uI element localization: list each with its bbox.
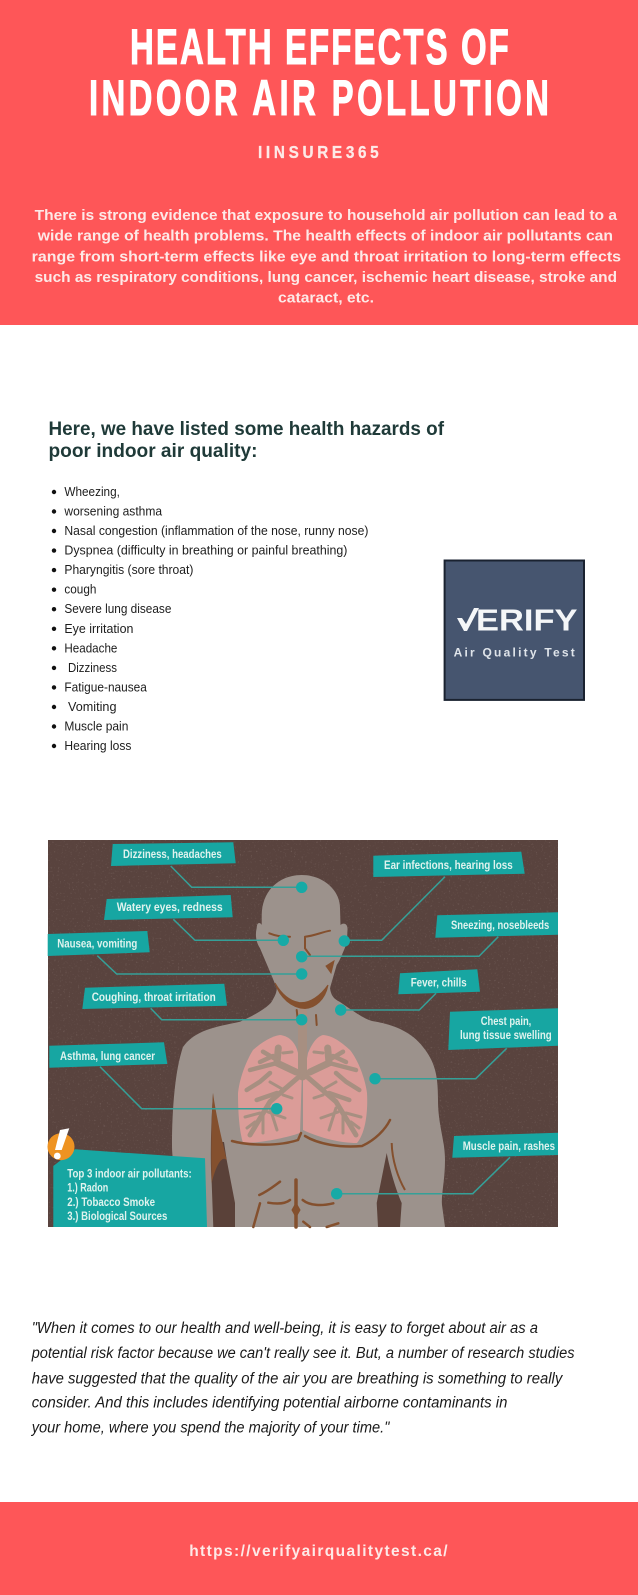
label: sneezing, nosebleeds xyxy=(435,912,558,938)
hazards bullet list: worsening asthma xyxy=(63,504,162,518)
quote paragraph: consider. And this includes identifying potential airborne contaminants in xyxy=(32,1394,507,1411)
title: INDOOR AIR POLLUTION xyxy=(89,70,549,126)
lungs xyxy=(238,1035,367,1143)
label: asthma, lung cancer xyxy=(49,1042,167,1068)
label: chest pain, lung tissue swelling: Chest pain, xyxy=(481,1016,531,1028)
quote paragraph: "When it comes to our health and well-being, it is easy to forget about air as a xyxy=(32,1320,538,1337)
quote paragraph: have suggested that the quality of the air you are breathing is something to really xyxy=(32,1370,563,1387)
logo: Verify Air Quality Test: Air Quality Test xyxy=(454,646,577,660)
footer band xyxy=(0,1502,638,1595)
label: muscle pain, rashes: Muscle pain, rashes xyxy=(463,1141,555,1153)
right bronchial tree xyxy=(305,1048,361,1135)
icon: check mark xyxy=(457,608,479,631)
label: coughing, throat irritation xyxy=(82,984,227,1009)
intro paragraph xyxy=(32,207,621,307)
hazards heading xyxy=(48,418,444,462)
title xyxy=(89,19,549,126)
hazards bullet list: Fatigue-nausea xyxy=(64,680,147,694)
intro paragraph: cataract, etc. xyxy=(278,290,374,307)
intro paragraph: There is strong evidence that exposure to household air pollution can lead to a xyxy=(35,207,618,224)
body side gaps xyxy=(211,1093,235,1227)
hazards bullet list: Headache xyxy=(64,641,117,655)
label: chest pain, lung tissue swelling xyxy=(448,1008,558,1050)
label: fever, chills: Fever, chills xyxy=(411,978,467,990)
label: dizziness, headaches: Dizziness, headaches xyxy=(123,849,222,861)
hazards heading: poor indoor air quality: xyxy=(48,440,258,462)
quote paragraph: potential risk factor because we can't really see it. But, a number of research studies xyxy=(31,1345,575,1362)
intro paragraph: wide range of health problems. The health effects of indoor air pollutants can xyxy=(37,228,613,245)
hazards bullet list xyxy=(52,485,368,753)
label: asthma, lung cancer: Asthma, lung cancer xyxy=(60,1051,155,1063)
callout: top 3 indoor air pollutants: 3.) Biological Sources xyxy=(67,1211,167,1223)
label: nausea, vomiting xyxy=(48,931,150,956)
subtitle: brand: IINSURE365 xyxy=(258,142,379,162)
hazards bullet list: Nasal congestion (inflammation of the nose, runny nose) xyxy=(64,524,368,538)
logo: Verify Air Quality Test: ERIFY xyxy=(476,604,578,638)
hazards bullet list: Vomiting xyxy=(68,700,117,714)
callout: top 3 indoor air pollutants: 1.) Radon xyxy=(67,1183,108,1195)
hazards bullet list: Severe lung disease xyxy=(64,602,171,616)
hazards bullet list: Wheezing, xyxy=(64,485,120,499)
hazards bullet list: Eye irritation xyxy=(64,622,133,636)
callout: top 3 indoor air pollutants: Top 3 indoor air pollutants: xyxy=(67,1169,192,1181)
intro paragraph: such as respiratory conditions, lung cancer, ischemic heart disease, stroke and xyxy=(35,269,617,286)
callout: top 3 indoor air pollutants: 2.) Tobacco Smoke xyxy=(67,1197,155,1209)
title: HEALTH EFFECTS OF xyxy=(130,19,509,75)
left bronchial tree xyxy=(245,1048,301,1135)
intro paragraph: range from short-term effects like eye and throat irritation to long-term effects xyxy=(32,248,621,265)
quote paragraph: your home, where you spend the majority of your time." xyxy=(31,1419,391,1436)
trachea and bronchi xyxy=(245,1012,361,1135)
connector lines xyxy=(97,866,510,1194)
icon: exclamation badge xyxy=(48,1128,74,1160)
body health effects illustration xyxy=(48,840,558,1227)
label: ear infections, hearing loss xyxy=(373,852,525,877)
label: dizziness, headaches xyxy=(111,842,236,866)
label: nausea, vomiting: Nausea, vomiting xyxy=(57,939,137,951)
label: sneezing, nosebleeds: Sneezing, nosebleeds xyxy=(451,920,549,932)
label: chest pain, lung tissue swelling: lung tissue swelling xyxy=(460,1030,552,1042)
hazards bullet list: Dizziness xyxy=(68,661,117,675)
label: ear infections, hearing loss: Ear infections, hearing loss xyxy=(384,860,513,872)
label: fever, chills xyxy=(398,969,480,994)
header panel xyxy=(0,0,638,325)
connector dots xyxy=(271,882,381,1199)
hazards bullet list: Hearing loss xyxy=(64,739,131,753)
diaphragm and muscles lines xyxy=(232,931,390,1227)
footer url: https://verifyairqualitytest.ca/ xyxy=(189,1543,450,1560)
label: watery eyes, redness: Watery eyes, redness xyxy=(117,902,223,914)
callout: top 3 indoor air pollutants xyxy=(53,1149,207,1227)
label: coughing, throat irritation: Coughing, throat irritation xyxy=(92,992,216,1004)
hazards bullet list: Pharyngitis (sore throat) xyxy=(64,563,193,577)
human body silhouette xyxy=(172,875,445,1227)
label: watery eyes, redness xyxy=(104,895,233,920)
quote paragraph xyxy=(31,1320,575,1436)
hazards bullet list: Dyspnea (difficulty in breathing or painful breathing) xyxy=(64,544,347,558)
hazards bullet list: cough xyxy=(64,583,96,597)
hazards heading: Here, we have listed some health hazards of xyxy=(48,418,444,440)
hazards bullet list: Muscle pain xyxy=(64,720,128,734)
label: muscle pain, rashes xyxy=(452,1133,558,1158)
logo: Verify Air Quality Test xyxy=(445,560,584,700)
